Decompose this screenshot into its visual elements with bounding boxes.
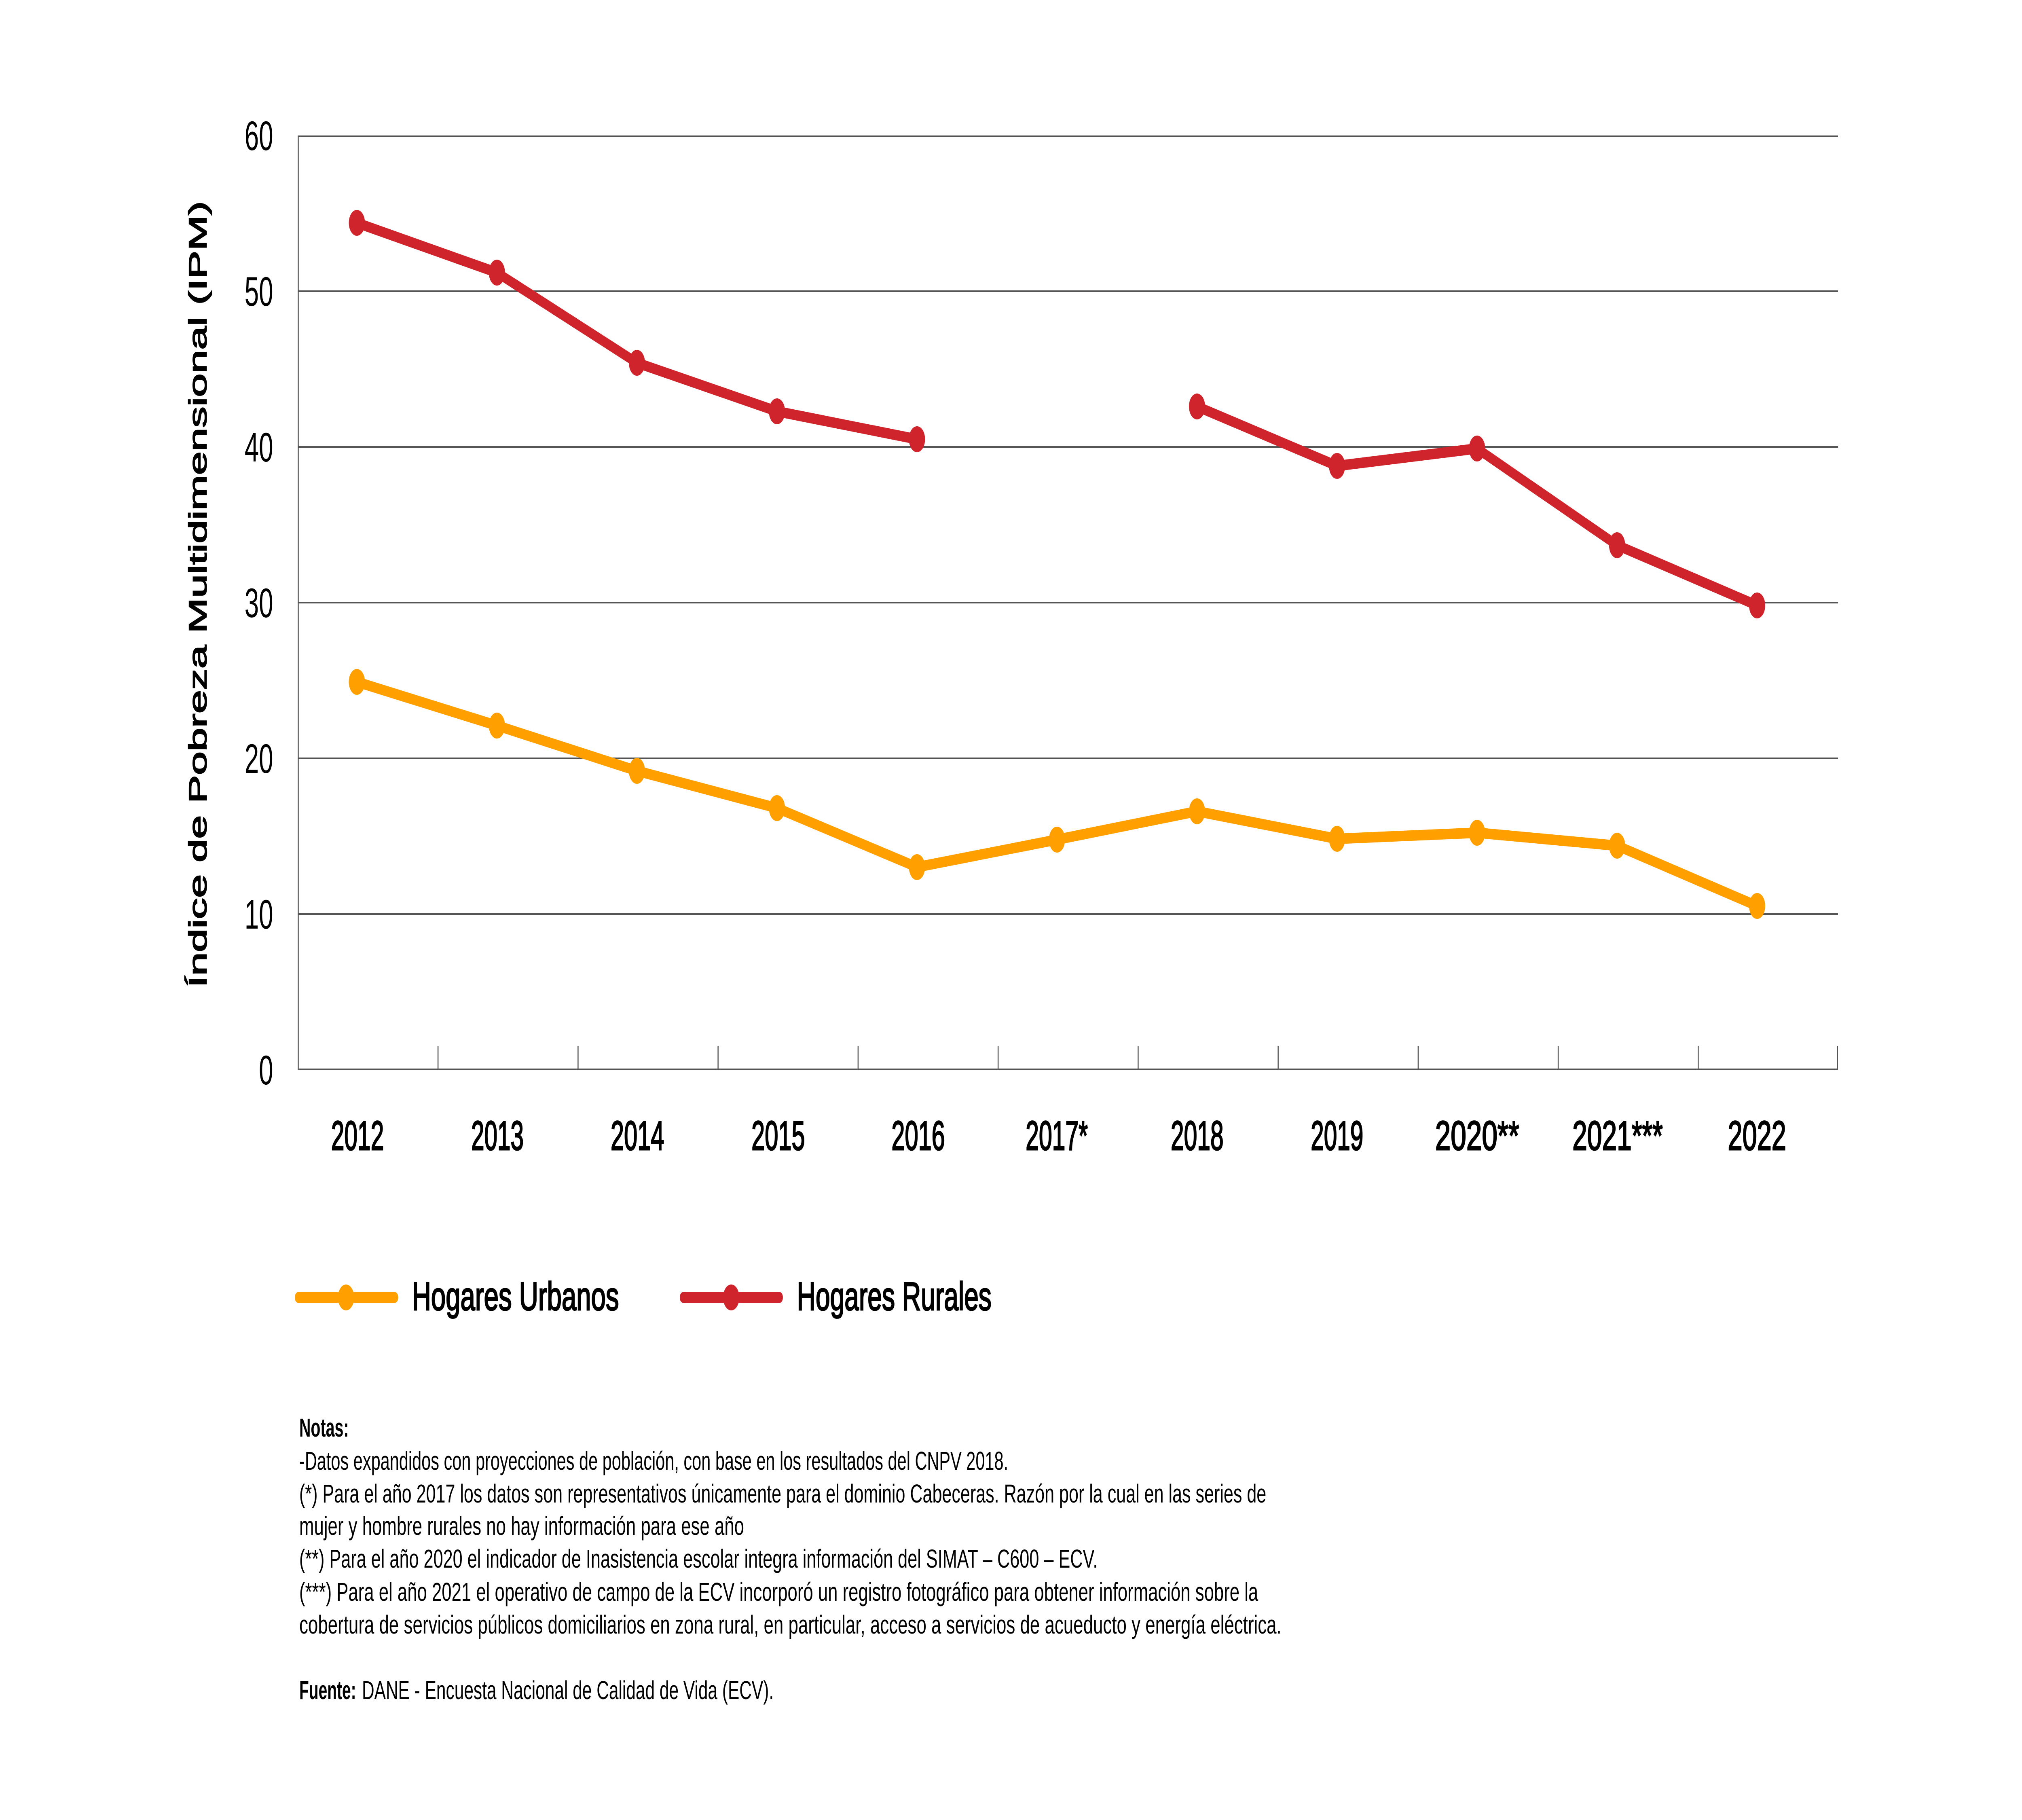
notes block: -Datos expandidos con proyecciones de población, con base en los resultados del CNPV 2018. — [299, 1447, 1008, 1475]
x axis year labels: 2016 — [891, 1113, 945, 1159]
y axis tick labels: 40 — [245, 425, 273, 471]
y axis tick labels: 50 — [245, 269, 273, 315]
source: Fuente: — [299, 1676, 356, 1705]
x axis year labels: 2013 — [471, 1113, 524, 1159]
notes block: (***) Para el año 2021 el operativo de campo de la ECV incorporó un registro fotográfico para obtener información sobre la — [299, 1578, 1258, 1606]
x axis year labels: 2020** — [1435, 1113, 1519, 1159]
y axis title: Índice de Pobreza Multidimensional (IPM) — [184, 201, 212, 988]
notes block: (*) Para el año 2017 los datos son representativos únicamente para el dominio Cabeceras. Razón por la cual en las series de — [299, 1480, 1266, 1508]
grid lines and axes — [298, 135, 1838, 1070]
legend item: Hogares Urbanos: Hogares Urbanos — [412, 1274, 619, 1319]
x axis year labels: 2015 — [751, 1113, 805, 1159]
y axis tick labels: 10 — [245, 892, 273, 938]
series: Hogares Urbanos — [349, 669, 1765, 919]
notes block: cobertura de servicios públicos domiciliarios en zona rural, en particular, acceso a servicios de acueducto y energía eléctrica. — [299, 1611, 1282, 1639]
x axis year labels: 2017* — [1026, 1113, 1088, 1159]
y axis tick labels: 30 — [245, 580, 273, 626]
notes block: Notas: — [299, 1414, 349, 1442]
x axis year labels: 2018 — [1171, 1113, 1224, 1159]
legend item: Hogares Urbanos — [298, 1274, 619, 1319]
notes block: (**) Para el año 2020 el indicador de Inasistencia escolar integra información del SIMAT – C600 – ECV. — [299, 1545, 1098, 1573]
legend item: Hogares Rurales — [683, 1274, 992, 1319]
legend — [298, 1274, 992, 1319]
y axis tick labels: 60 — [245, 113, 273, 159]
line chart — [184, 113, 1838, 1159]
x axis year labels — [331, 1113, 1786, 1159]
y axis tick labels — [245, 113, 273, 1094]
y axis tick labels: 0 — [259, 1048, 273, 1094]
x axis year labels: 2014 — [611, 1113, 664, 1159]
x axis year labels: 2021*** — [1572, 1113, 1663, 1159]
series: Hogares Rurales — [349, 210, 1765, 618]
legend item: Hogares Rurales: Hogares Rurales — [797, 1274, 992, 1319]
notes block: mujer y hombre rurales no hay información para ese año — [299, 1512, 744, 1541]
notes block — [299, 1414, 1282, 1639]
x axis year labels: 2012 — [331, 1113, 384, 1159]
x axis year labels: 2022 — [1728, 1113, 1786, 1159]
y axis tick labels: 20 — [245, 736, 273, 782]
source: DANE - Encuesta Nacional de Calidad de Vida (ECV). — [362, 1676, 774, 1705]
x axis year labels: 2019 — [1311, 1113, 1363, 1159]
